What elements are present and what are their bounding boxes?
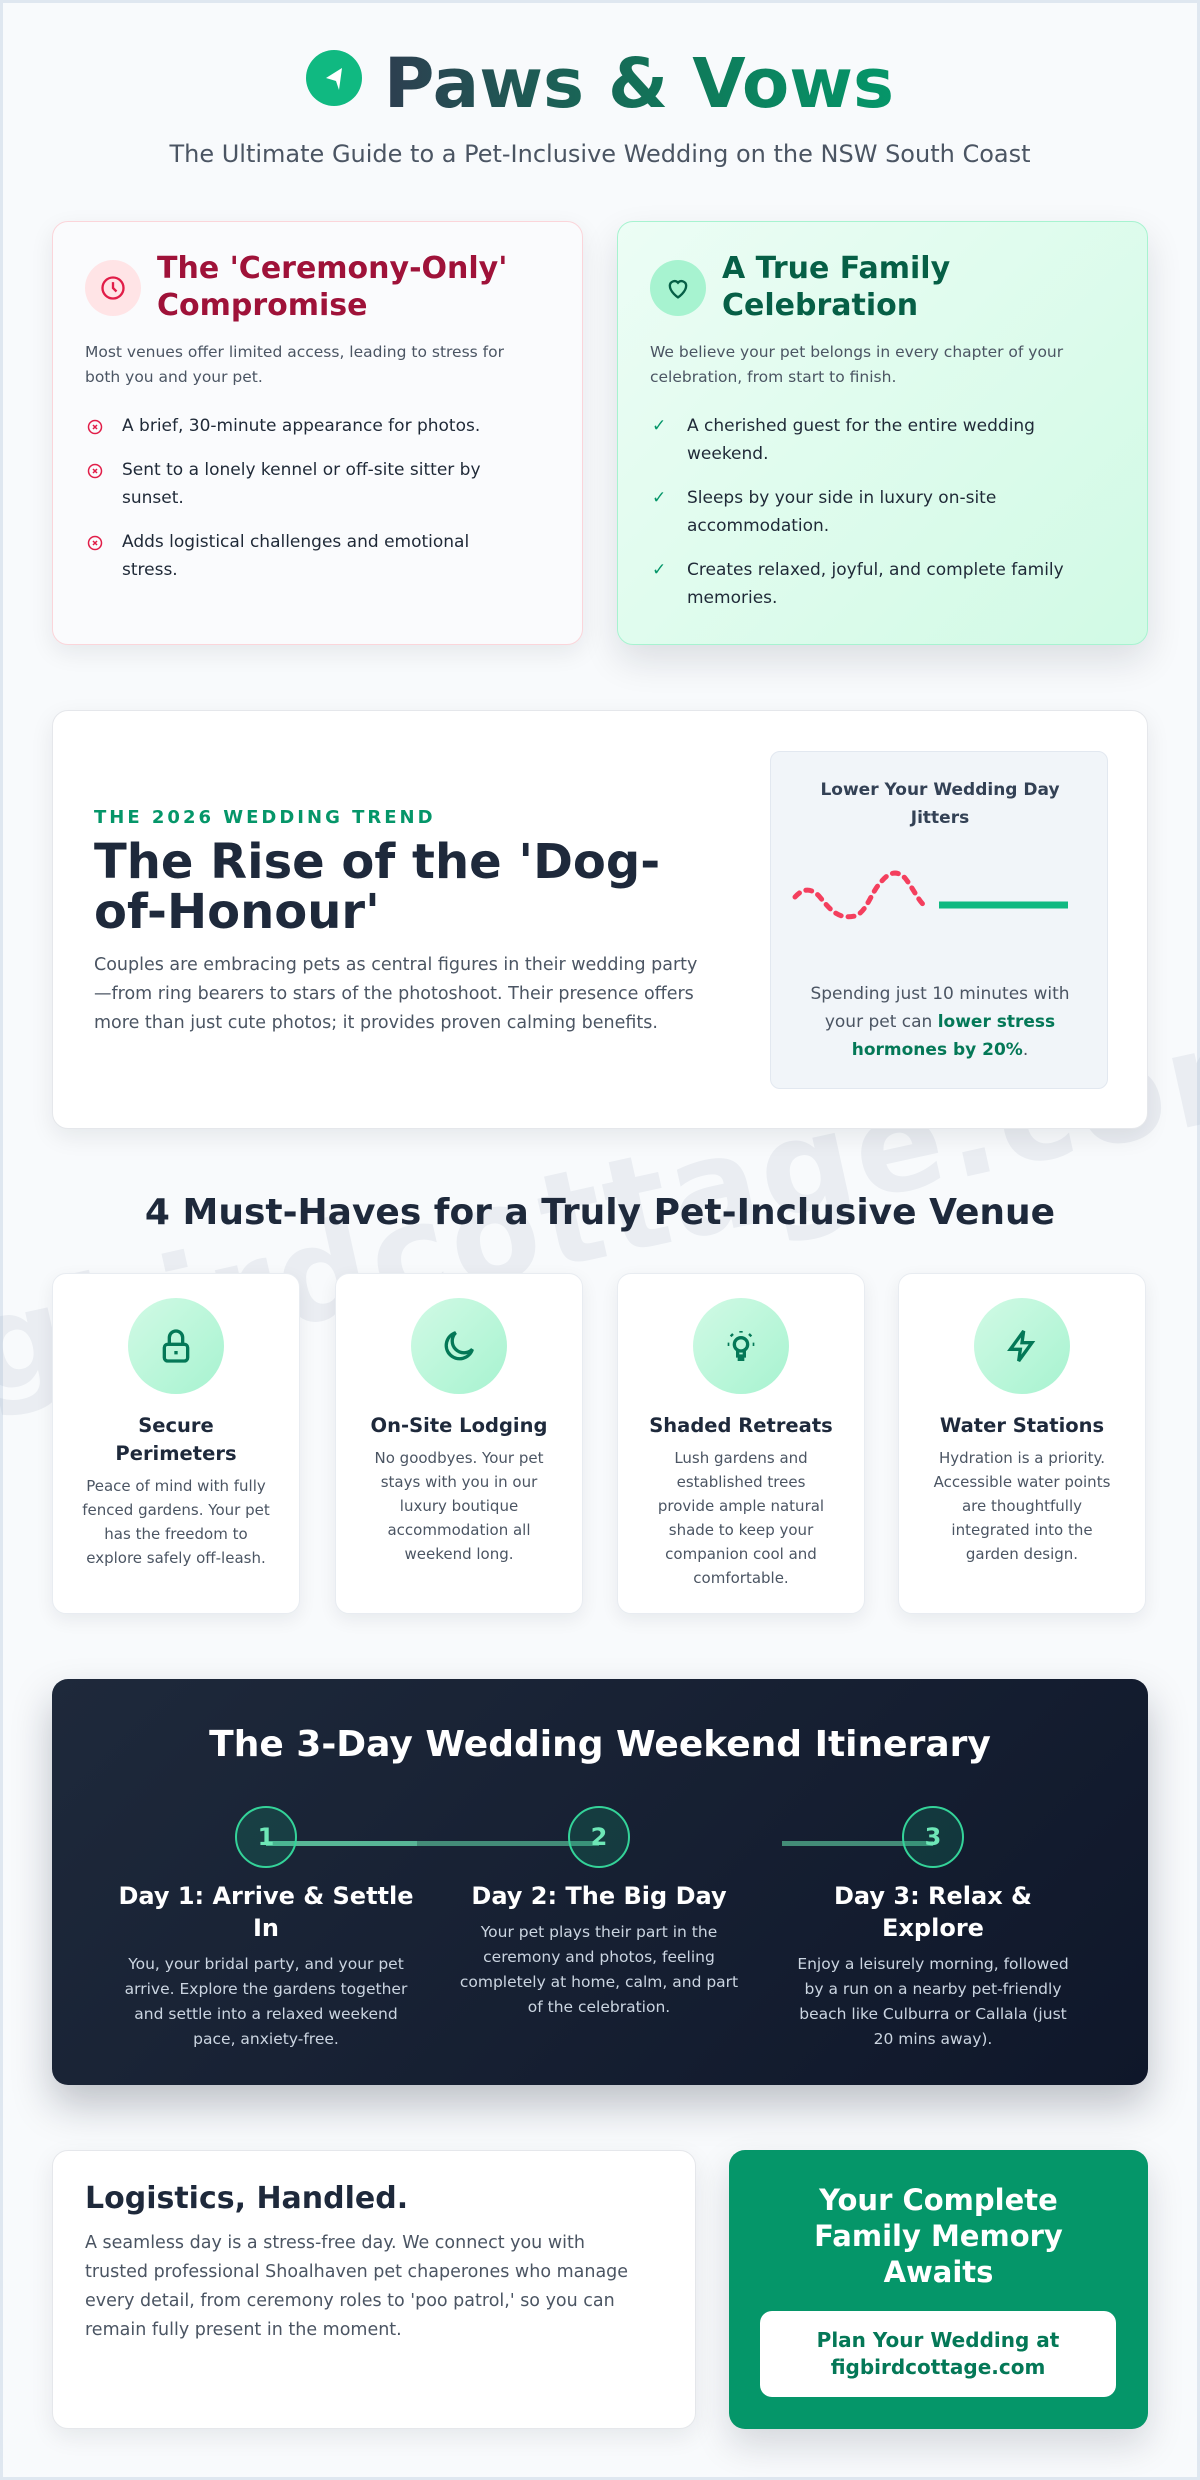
list: benefits: ✓: [652, 416, 666, 436]
day 3: Enjoy a leisurely morning, followed by a run on a nearby pet-friendly beach like Culburra or Callala (just 20 mins away).: [797, 1955, 1069, 2048]
list: benefits: A cherished guest for the entire wedding weekend.: [687, 416, 1035, 464]
heading: The 'Ceremony-Only': [157, 251, 507, 286]
feature: on-site lodging: [335, 1273, 583, 1614]
day 2: Day 2: The Big Day: [471, 1882, 727, 1910]
heading: Compromise: [157, 288, 368, 323]
day 1: Day 1: Arrive & Settle In: [118, 1882, 414, 1942]
panel: dog-of-honour trend: [52, 710, 1148, 1129]
icon: clock: [85, 260, 141, 316]
feature: secure perimeters: Secure Perimeters: [115, 1414, 237, 1465]
day 2: [460, 1882, 738, 2016]
feature: shaded retreats: Lush gardens and established trees provide ample natural shade to keep your companion cool and comfortable.: [658, 1449, 824, 1587]
step 1 circle: [235, 1806, 297, 1868]
subtitle: The Ultimate Guide to a Pet-Inclusive Wedding on the NSW South Coast: [169, 140, 1031, 168]
chart title: Lower Your Wedding Day Jitters: [820, 780, 1060, 828]
cta button: Plan Your Wedding at: [817, 2328, 1059, 2352]
heading: of-Honour': [94, 884, 380, 940]
cta button: [760, 2311, 1116, 2397]
heading: [157, 251, 507, 323]
cta heading: [814, 2183, 1063, 2289]
heading: A True Family: [722, 251, 950, 286]
heading: Celebration: [722, 288, 918, 323]
icon: logo circle: [306, 50, 362, 106]
chart: stress line: [792, 870, 1068, 920]
list: benefits: Sleeps by your side in luxury on-site accommodation.: [687, 488, 996, 536]
icon: moon: [411, 1298, 507, 1394]
chart box: jitters: [770, 751, 1108, 1089]
cta heading: Your Complete: [819, 2183, 1058, 2217]
list: drawbacks: Sent to a lonely kennel or off-site sitter by sunset.: [122, 460, 481, 508]
cta button: figbirdcottage.com: [831, 2355, 1045, 2379]
day 3: Day 3: Relax & Explore: [834, 1882, 1032, 1942]
panel: true family celebration: [617, 221, 1148, 645]
paragraph: A seamless day is a stress-free day. We connect you with trusted professional Shoalhaven pet chaperones who manage every detail, from ceremony roles to 'poo patrol,' so you can remain fully present in the moment.: [85, 2233, 628, 2340]
timeline connector: [266, 1841, 933, 1846]
step 2 circle: 2: [591, 1823, 607, 1851]
feature: water stations: Water Stations: [940, 1414, 1104, 1437]
description: Most venues offer limited access, leading to stress for both you and your pet.: [85, 343, 504, 386]
feature: shaded retreats: [617, 1273, 865, 1614]
list: drawbacks: A brief, 30-minute appearance for photos.: [122, 416, 480, 436]
step 3 circle: 3: [925, 1823, 941, 1851]
day 3: [797, 1882, 1069, 2048]
list: benefits: Creates relaxed, joyful, and complete family memories.: [687, 560, 1064, 608]
cta heading: Family Memory: [814, 2219, 1063, 2253]
chart caption: Spending just 10 minutes with your pet can lower stress hormones by 20%.: [810, 984, 1070, 1060]
day 1: [118, 1882, 414, 2048]
description: We believe your pet belongs in every chapter of your celebration, from start to finish.: [650, 343, 1063, 386]
feature: water stations: Hydration is a priority. Accessible water points are thoughtfully integrated into the garden design.: [934, 1449, 1110, 1563]
feature: shaded retreats: Shaded Retreats: [649, 1414, 833, 1437]
list: benefits: ✓: [652, 488, 666, 508]
list: benefits: ✓: [652, 560, 666, 580]
section heading: must-haves: 4 Must-Haves for a Truly Pet-Inclusive Venue: [145, 1192, 1055, 1233]
icon: bolt: [974, 1298, 1070, 1394]
icon: lock: [128, 1298, 224, 1394]
list: drawbacks: Adds logistical challenges and emotional stress.: [122, 532, 469, 580]
eyebrow: THE 2026 WEDDING TREND: [94, 807, 436, 828]
itinerary heading: The 3-Day Wedding Weekend Itinerary: [209, 1724, 991, 1765]
paragraph: Couples are embracing pets as central figures in their wedding party —from ring bearers to stars of the photoshoot. Their presence offers more than just cute photos; it provides proven calming benefits.: [94, 955, 697, 1033]
panel: logistics: [52, 2150, 696, 2429]
step 3 circle: [902, 1806, 964, 1868]
step 2 circle: [568, 1806, 630, 1868]
feature: on-site lodging: On-Site Lodging: [371, 1414, 547, 1437]
panel: itinerary: [52, 1679, 1148, 2085]
panel: ceremony-only compromise: [52, 221, 583, 645]
list: drawbacks: [88, 416, 481, 580]
feature: on-site lodging: No goodbyes. Your pet stays with you in our luxury boutique accommodation all weekend long.: [375, 1449, 543, 1563]
title: Paws & Vows: [384, 44, 894, 124]
list: benefits: [652, 416, 1064, 608]
feature: secure perimeters: Peace of mind with fully fenced gardens. Your pet has the freedom to explore safely off-leash.: [82, 1477, 270, 1567]
feature: water stations: [898, 1273, 1146, 1614]
heading: [94, 834, 660, 940]
heading: [722, 251, 950, 323]
heading: The Rise of the 'Dog-: [94, 834, 660, 890]
icon: heart: [650, 260, 706, 316]
day 1: You, your bridal party, and your pet arrive. Explore the gardens together and settle into a relaxed weekend pace, anxiety-free.: [125, 1955, 407, 2048]
feature: secure perimeters: [52, 1273, 300, 1614]
day 2: Your pet plays their part in the ceremony and photos, feeling completely at home, calm, and part of the celebration.: [460, 1923, 738, 2016]
heading: Logistics, Handled.: [85, 2181, 408, 2216]
step 1 circle: 1: [258, 1823, 274, 1851]
panel: call to action: [729, 2150, 1148, 2429]
cta heading: Awaits: [884, 2255, 993, 2289]
icon: bulb: [693, 1298, 789, 1394]
